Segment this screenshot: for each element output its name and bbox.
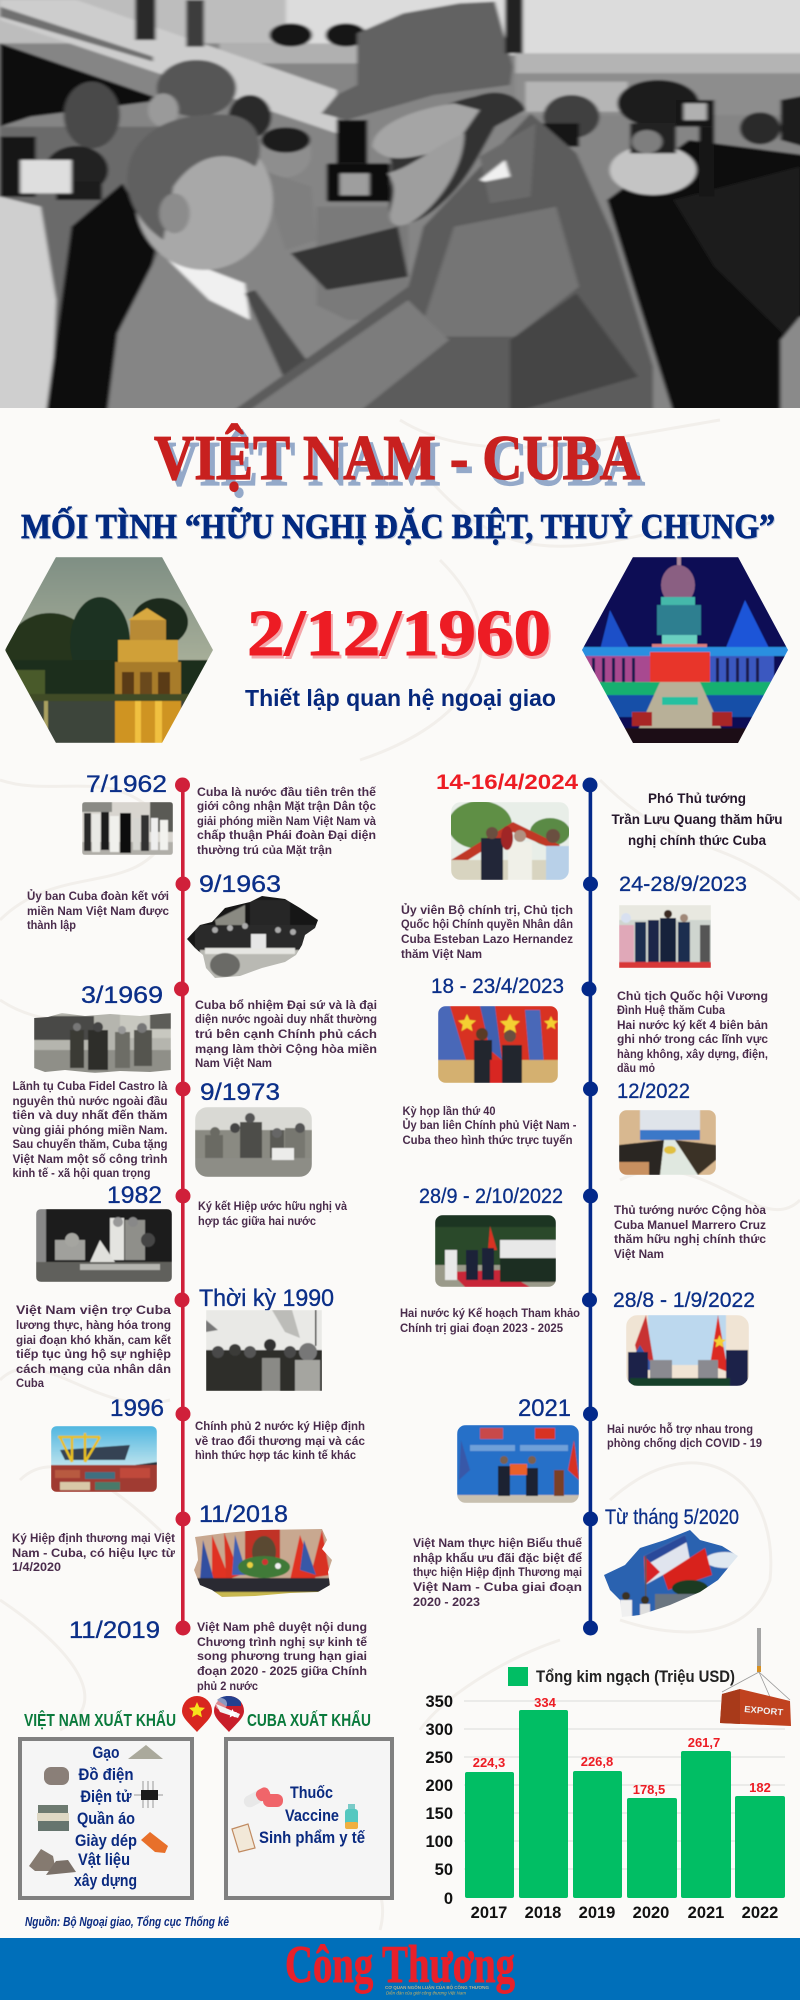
description: Ký kết Hiệp ước hữu nghị và	[198, 1199, 347, 1213]
photo	[448, 801, 570, 880]
milestone 2021	[457, 1395, 762, 1503]
item: medicine	[242, 1783, 333, 1809]
description: Việt Nam - Cuba giai đoạn	[413, 1580, 582, 1594]
description: Việt Nam viện trợ Cuba	[16, 1303, 171, 1317]
description	[607, 1421, 762, 1450]
date heading: 2/12/1960	[247, 597, 551, 670]
item: rice: Gạo	[92, 1743, 120, 1762]
description: Ủy ban Cuba đoàn kết với	[27, 888, 169, 903]
year labels: 2019	[579, 1904, 615, 1922]
description: kinh tế - xã hội quan trọng	[12, 1166, 150, 1180]
hexagon photo: Hanoi Turtle Tower	[0, 557, 220, 743]
year labels	[471, 1904, 778, 1922]
photo	[185, 895, 320, 980]
milestone 3/1969	[34, 982, 377, 1073]
description: Nam Việt Nam	[195, 1056, 272, 1070]
value labels	[473, 1695, 771, 1797]
description: hợp tác giữa hai nước	[198, 1214, 316, 1228]
value labels: 178,5	[633, 1782, 665, 1797]
year labels: 2017	[471, 1904, 507, 1922]
timeline: blue line with markers	[582, 778, 598, 1636]
date: 11/2019	[69, 1617, 160, 1644]
title: VIỆT NAM - CUBA	[159, 428, 645, 499]
date: 14-16/4/2024	[436, 770, 578, 794]
description: diện nước ngoài duy nhất thường	[195, 1012, 377, 1026]
source: Nguồn: Bộ Ngoại giao, Tổng cục Thống kê	[25, 1914, 229, 1929]
description: Hai nước ký kết 4 biên bản	[617, 1018, 768, 1032]
icon: Cuba flag pin	[214, 1696, 244, 1732]
photo	[51, 1426, 157, 1492]
description: Quốc hội Chính quyền Nhân dân	[401, 917, 573, 931]
description	[195, 1419, 365, 1462]
description: Trần Lưu Quang thăm hữu	[612, 811, 782, 827]
item: biological products	[232, 1824, 365, 1852]
milestone Thời kỳ 1990	[16, 1285, 334, 1391]
description: mạng làm thời Cộng hòa miền	[195, 1042, 377, 1056]
value labels: 224,3	[473, 1755, 505, 1770]
photo	[619, 1110, 716, 1175]
milestone 28/9 - 2/10/2022	[419, 1185, 766, 1287]
date: 12/2022	[617, 1080, 690, 1103]
milestone 7/1962	[82, 771, 376, 857]
description: Cuba là nước đầu tiên trên thế	[197, 785, 376, 799]
description	[197, 785, 376, 857]
panel: Vietnam exports	[20, 1739, 192, 1898]
item: clothes: Quần áo	[77, 1809, 135, 1828]
milestone 1982	[36, 1182, 347, 1282]
photo	[438, 1006, 558, 1083]
photo	[604, 1530, 738, 1617]
item: electronics	[80, 1781, 163, 1808]
description: Cuba Esteban Lazo Hernandez	[401, 932, 573, 946]
description: Việt Nam phê duyệt nội dung	[197, 1620, 367, 1634]
icon: Vietnam flag pin	[182, 1696, 212, 1732]
date: 28/8 - 1/9/2022	[613, 1289, 755, 1312]
milestone 9/1963	[27, 871, 320, 980]
description: Chương trình nghị sự kinh tế	[197, 1635, 367, 1649]
year labels: 2018	[525, 1904, 561, 1922]
description: lương thực, hàng hóa trong	[16, 1318, 171, 1332]
date: 1996	[110, 1395, 164, 1422]
description: Ủy viên Bộ chính trị, Chủ tịch	[401, 902, 573, 917]
y axis labels: 200	[425, 1777, 453, 1795]
title: VIỆT NAM - CUBA	[154, 422, 640, 493]
description: tiên và duy nhất đến thăm	[12, 1108, 168, 1122]
y axis labels: 150	[425, 1805, 453, 1823]
bars	[465, 1710, 785, 1898]
description: Cuba Manuel Marrero Cruz	[614, 1218, 766, 1232]
date: 3/1969	[81, 982, 163, 1009]
date: 28/9 - 2/10/2022	[419, 1185, 563, 1208]
milestone 1996	[51, 1395, 365, 1492]
value labels: 261,7	[688, 1735, 720, 1750]
y axis labels: 300	[425, 1721, 453, 1739]
description: Cuba	[16, 1376, 44, 1390]
item: medicine: Thuốc	[290, 1783, 333, 1802]
photo	[195, 1107, 312, 1177]
item: clothes	[37, 1805, 135, 1831]
description: Chủ tịch Quốc hội Vương	[617, 989, 768, 1003]
description: 2020 - 2023	[413, 1595, 480, 1609]
item: vaccine	[285, 1804, 358, 1829]
description: giải phóng miền Nam Việt Nam và	[197, 814, 376, 828]
date caption: Thiết lập quan hệ ngoại giao	[245, 685, 556, 711]
item: building materials: Vật liệu	[78, 1850, 130, 1869]
description: Việt Nam	[614, 1247, 664, 1261]
milestone 24-28/9/2023	[401, 873, 747, 968]
description: thường trú của Mặt trận	[197, 843, 332, 857]
date: 24-28/9/2023	[619, 873, 747, 896]
description: Ủy ban liên Chính phủ Việt Nam -	[402, 1117, 576, 1132]
description	[195, 998, 377, 1070]
item: biological products: Sinh phẩm y tế	[259, 1828, 365, 1847]
description: nghị chính thức Cuba	[628, 832, 766, 848]
description: vùng giải phóng miền Nam.	[12, 1123, 168, 1137]
year labels: 2022	[742, 1904, 778, 1922]
description: Việt Nam thực hiện Biểu thuế	[413, 1536, 582, 1550]
description	[197, 1620, 367, 1693]
logo: Công Thương: Công Thương	[285, 1936, 515, 1994]
description: Thủ tướng nước Cộng hòa	[614, 1203, 766, 1217]
description: thực hiện Hiệp định Thương mại	[413, 1565, 582, 1579]
description: cách mạng của nhân dân	[16, 1362, 171, 1376]
description	[198, 1199, 347, 1228]
footer band	[0, 1938, 800, 2000]
description: 1/4/2020	[12, 1560, 61, 1574]
hero photo: two leaders embracing	[0, 0, 800, 420]
year labels: 2021	[688, 1904, 724, 1922]
description: Chính trị giai đoạn 2023 - 2025	[400, 1321, 563, 1335]
description: Đình Huệ thăm Cuba	[617, 1003, 725, 1017]
description: Phó Thủ tướng	[648, 790, 746, 806]
milestone 14-16/4/2024	[436, 770, 782, 880]
description	[401, 902, 573, 961]
panel: Cuba exports	[226, 1739, 392, 1898]
description: hình thức hợp tác kinh tế khác	[195, 1448, 356, 1462]
description	[12, 1079, 168, 1180]
photo	[435, 1215, 556, 1287]
date: 9/1963	[199, 871, 281, 898]
photo	[194, 1529, 332, 1597]
y axis labels: 100	[425, 1833, 453, 1851]
date: Thời kỳ 1990	[199, 1285, 334, 1312]
description: song phương trung hạn giai	[197, 1649, 367, 1663]
description	[27, 888, 169, 932]
bar chart: total trade	[425, 1667, 785, 1922]
milestone từ tháng 5/2020	[413, 1506, 745, 1620]
milestone 12/2022	[402, 1080, 716, 1175]
y axis labels	[425, 1693, 453, 1908]
hexagon photo: Havana Capitol	[580, 557, 790, 747]
description	[612, 790, 782, 848]
description: Cuba bổ nhiệm Đại sứ và là đại	[195, 998, 377, 1012]
item: building materials	[29, 1849, 137, 1890]
date: Từ tháng 5/2020	[605, 1506, 739, 1529]
photo	[34, 1013, 171, 1073]
description: phòng chống dịch COVID - 19	[607, 1436, 762, 1450]
description: Hai nước ký Kế hoạch Tham khảo	[400, 1306, 580, 1320]
date: 9/1973	[200, 1079, 280, 1106]
heading: Vietnam exports: VIỆT NAM XUẤT KHẨU	[24, 1709, 176, 1730]
value labels: 226,8	[581, 1754, 613, 1769]
description	[12, 1531, 175, 1574]
y axis labels: 50	[435, 1861, 453, 1879]
item: electronics: Điện tử	[80, 1787, 132, 1806]
heading: Cuba exports: CUBA XUẤT KHẨU	[247, 1709, 371, 1730]
item: electrical goods: Đồ điện	[78, 1765, 134, 1784]
y axis labels: 350	[425, 1693, 453, 1711]
description: tiếp tục ủng hộ sự nghiệp	[16, 1347, 171, 1361]
year labels: 2020	[633, 1904, 669, 1922]
value labels: 334	[534, 1695, 557, 1710]
description: Ký Hiệp định thương mại Việt	[12, 1531, 175, 1545]
icon: export container on crane: EXPORT	[744, 1704, 784, 1717]
description: giai đoạn khó khăn, cam kết	[16, 1333, 171, 1347]
item: footwear	[75, 1831, 168, 1853]
chart legend: Tổng kim ngạch (Triệu USD)	[536, 1668, 735, 1686]
milestone 28/8 - 1/9/2022	[400, 1289, 755, 1386]
description: về trao đổi thương mại và các	[195, 1434, 365, 1448]
y axis labels: 250	[425, 1749, 453, 1767]
icon: export container on crane	[720, 1628, 791, 1726]
date: 2021	[518, 1395, 571, 1422]
description	[400, 1306, 580, 1335]
description: ghi nhớ trong các lĩnh vực	[617, 1032, 768, 1046]
description	[413, 1536, 582, 1609]
description	[617, 989, 768, 1075]
item: footwear: Giày dép	[75, 1831, 137, 1850]
description: miền Nam Việt Nam được	[27, 904, 169, 918]
photo	[82, 802, 173, 855]
date: 18 - 23/4/2023	[431, 975, 564, 998]
logo: Công Thương: CƠ QUAN NGÔN LUẬN CỦA BỘ CÔNG THƯƠNG	[385, 1983, 489, 1990]
milestone 11/2019	[69, 1617, 367, 1693]
description: nguyên thủ nước ngoài đầu	[12, 1094, 168, 1108]
description: thăm hữu nghị chính thức	[614, 1232, 766, 1246]
description	[614, 1203, 766, 1261]
description: giới công nhận Mặt trận Dân tộc	[197, 799, 376, 813]
description: Việt Nam một số công trình	[12, 1152, 168, 1166]
description: Nam - Cuba, có hiệu lực từ	[12, 1546, 175, 1560]
item: building materials: xây dựng	[74, 1871, 137, 1890]
description: Hai nước hỗ trợ nhau trong	[607, 1421, 753, 1436]
milestone 18-23/4/2023	[431, 975, 768, 1083]
description: Cuba theo hình thức trực tuyến	[402, 1133, 572, 1147]
description: thành lập	[27, 918, 76, 932]
description: Lãnh tụ Cuba Fidel Castro là	[12, 1079, 168, 1093]
date: 11/2018	[199, 1501, 288, 1528]
description: trú bên cạnh Chính phủ cách	[195, 1027, 377, 1041]
item: electrical goods	[44, 1765, 134, 1785]
description: dầu mỏ	[617, 1061, 655, 1075]
description: Kỳ họp lần thứ 40	[402, 1104, 496, 1118]
date: 7/1962	[86, 771, 167, 798]
item: vaccine: Vaccine	[285, 1806, 339, 1825]
photo	[457, 1425, 579, 1503]
photo	[36, 1209, 172, 1282]
milestone 11/2018	[12, 1501, 335, 1599]
logo: Công Thương: Diễn đàn của giới công thương Việt Nam	[386, 1990, 466, 1996]
description: Sau chuyến thăm, Cuba tặng	[12, 1137, 168, 1151]
description: hàng không, xây dựng, điện,	[617, 1047, 768, 1061]
photo	[206, 1310, 322, 1391]
description: Chính phủ 2 nước ký Hiệp định	[195, 1419, 365, 1433]
value labels: 182	[749, 1780, 771, 1795]
photo	[626, 1315, 749, 1386]
description	[16, 1303, 171, 1390]
timeline: red line with markers	[174, 778, 190, 1636]
item: rice	[92, 1743, 163, 1762]
date heading: 2/12/1960	[249, 600, 553, 673]
y axis labels: 0	[444, 1890, 453, 1908]
description: nhập khẩu ưu đãi đặc biệt để	[413, 1551, 582, 1565]
milestone 9/1973	[12, 1079, 312, 1180]
description: phủ 2 nước	[197, 1679, 258, 1693]
description: thăm Việt Nam	[401, 947, 482, 961]
date: 1982	[107, 1182, 162, 1209]
description: đoạn 2020 - 2025 giữa Chính	[197, 1664, 367, 1678]
description: chấp thuận Phái đoàn Đại diện	[197, 828, 376, 842]
description	[402, 1104, 576, 1147]
photo	[619, 905, 711, 968]
